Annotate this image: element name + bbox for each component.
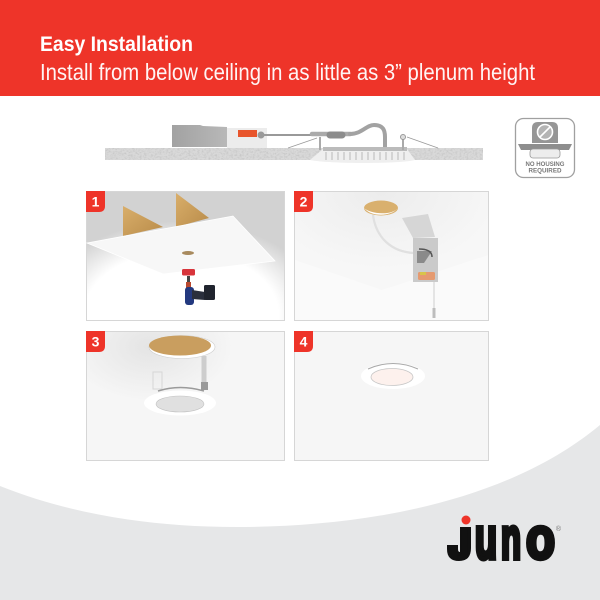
subtitle: Install from below ceiling in as little as 3” plenum height <box>40 59 536 85</box>
drilled hole <box>182 251 194 255</box>
logo: juno: o <box>526 506 555 572</box>
step badge 4 <box>294 331 313 352</box>
wooden joists <box>123 193 209 236</box>
ceiling tile <box>87 216 275 274</box>
icon: no housing required badge <box>516 118 574 178</box>
icon: drill with hole saw <box>182 269 215 305</box>
title: Easy Installation <box>40 33 193 56</box>
logo: juno: j <box>457 509 471 561</box>
panel: step 1 <box>86 191 284 320</box>
product cross-section diagram <box>105 125 483 163</box>
fixture <box>288 134 438 163</box>
ceiling edge shading <box>295 255 488 320</box>
icon: no housing required badge: NO HOUSING <box>526 162 565 168</box>
logo dot <box>462 516 470 524</box>
step badge 3: 3 <box>92 334 100 350</box>
installed downlight <box>361 363 425 389</box>
fixture trim <box>144 388 216 416</box>
ceiling hole <box>364 200 398 216</box>
logo: juno <box>447 516 561 562</box>
panel: step 4 <box>294 331 488 460</box>
logo: juno: u <box>475 506 497 572</box>
step badge 1 <box>86 191 105 212</box>
step badge 4: 4 <box>300 334 308 350</box>
step badge 3 <box>86 331 105 352</box>
panel: step 2 <box>294 191 488 320</box>
spring clips <box>153 356 208 390</box>
logo: juno: n <box>501 506 521 572</box>
step badge 1: 1 <box>92 194 100 210</box>
icon: junction box with flap <box>402 214 438 282</box>
ceiling hole <box>149 336 215 358</box>
registered mark: ® <box>556 525 562 533</box>
conduit <box>262 125 385 149</box>
bottom grey curved band <box>0 425 600 600</box>
icon: no housing required badge: REQUIRED <box>528 168 562 174</box>
junction box <box>172 125 267 148</box>
pull cord and connector <box>432 282 436 318</box>
header banner <box>0 0 600 96</box>
step badge 2: 2 <box>300 194 308 210</box>
ceiling strip <box>105 148 483 160</box>
step badge 2 <box>294 191 313 212</box>
panel: step 3 <box>86 331 284 460</box>
cable <box>373 215 414 253</box>
